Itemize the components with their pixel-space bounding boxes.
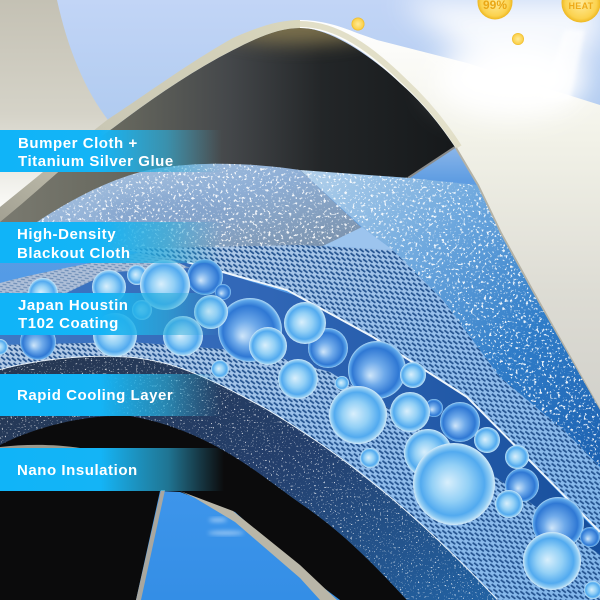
panel: cream right fabric <box>300 20 600 410</box>
layer: lower mesh <box>0 342 600 600</box>
droplet: gold left <box>352 18 364 30</box>
panel: dark underside of arch <box>0 28 455 222</box>
label: High-Density Blackout Cloth <box>0 222 222 263</box>
layer: back foam <box>37 164 362 250</box>
grey edge of lower left black fabric <box>136 490 165 600</box>
layer: upper mesh <box>120 245 600 532</box>
label: Japan Houstin T102 Coating: T102 Coating <box>18 315 119 332</box>
white mesh edge lines <box>0 262 600 600</box>
bottom cream strip <box>180 491 337 600</box>
arch rim right <box>300 24 600 410</box>
label: Nano Insulation: Nano Insulation <box>17 462 138 479</box>
black lower fabric <box>0 410 407 600</box>
label: Japan Houstin T102 Coating <box>0 293 222 335</box>
sunlight rays <box>400 0 600 118</box>
layer: pale left mesh <box>0 250 190 302</box>
coin: HEAT <box>562 0 600 22</box>
label: Nano Insulation <box>0 448 224 491</box>
bubbles <box>0 259 600 599</box>
coin: 99% <box>478 0 512 20</box>
coin: HEAT: HEAT <box>568 1 594 11</box>
label: Bumper Cloth + Titanium Silver Glue: Titanium Silver Glue <box>18 153 174 170</box>
layer: dark foam <box>0 340 510 600</box>
label: Rapid Cooling Layer <box>0 374 222 416</box>
label: High-Density Blackout Cloth: High-Density <box>17 226 116 243</box>
droplet: gold right <box>512 33 524 45</box>
bright blue lower sky cloud <box>208 518 244 535</box>
label: Rapid Cooling Layer: Rapid Cooling Layer <box>17 387 173 404</box>
layer: front foam <box>300 170 600 467</box>
panel: left cream fabric <box>0 0 108 208</box>
label: Japan Houstin T102 Coating: Japan Houstin <box>18 297 128 314</box>
thin cream edge left <box>0 445 80 449</box>
small sky gap <box>323 227 393 250</box>
label: High-Density Blackout Cloth: Blackout Cloth <box>17 245 131 262</box>
arch rim left <box>0 20 300 222</box>
label: Bumper Cloth + Titanium Silver Glue <box>0 130 222 172</box>
label: Bumper Cloth + Titanium Silver Glue: Bumper Cloth + <box>18 135 138 152</box>
layer: bubble channel <box>0 250 600 600</box>
